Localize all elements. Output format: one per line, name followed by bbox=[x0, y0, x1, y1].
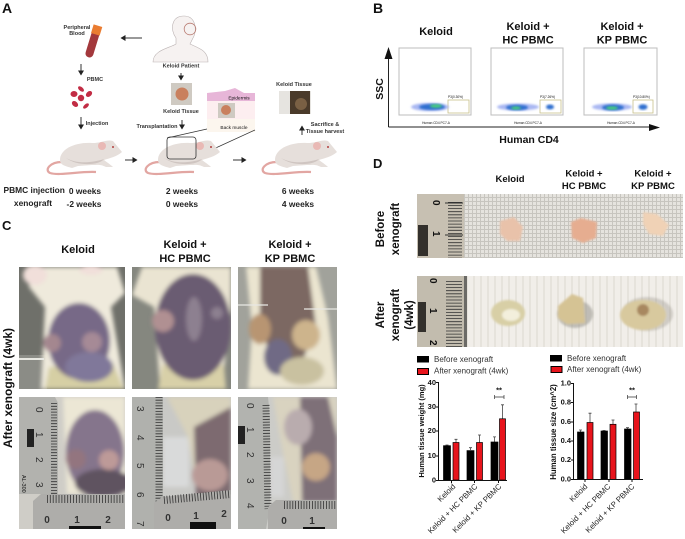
timeline row: PBMC injection bbox=[4, 185, 314, 196]
error bars bbox=[446, 405, 504, 450]
arrow: blood to PBMC bbox=[80, 64, 82, 75]
skin section inset bbox=[207, 88, 255, 132]
arrow: mouse 2 to mouse 3 bbox=[233, 159, 246, 161]
photo: keloid with rulers: 2 bbox=[33, 457, 44, 463]
arrowheads bbox=[384, 47, 660, 131]
photo: HC PBMC with rulers: 6 bbox=[134, 492, 145, 498]
bars bbox=[578, 412, 640, 480]
photo: harvested tissue bbox=[279, 91, 311, 114]
row label: after xenograft: After bbox=[375, 302, 387, 328]
y tick labels: 0.6 bbox=[561, 417, 571, 426]
panel letter C: C bbox=[2, 218, 12, 233]
row label: before xenograft: Before bbox=[375, 211, 387, 247]
flow plot: keloid + KP PBMC: P3(10.80%) bbox=[633, 95, 650, 99]
flow plot: keloid: Human CD4 PC7-A bbox=[422, 121, 451, 125]
timeline row: xenograft: 0 weeks bbox=[166, 199, 198, 209]
flow plot: keloid + HC PBMC: Human CD4 PC7-A bbox=[514, 121, 543, 125]
y tick labels: 0.2 bbox=[561, 455, 571, 464]
photo: HC PBMC with rulers: 2 bbox=[221, 509, 227, 520]
photo: KP PBMC with rulers bbox=[238, 397, 337, 529]
y axis title: Human tissue weight (mg) bbox=[417, 384, 426, 478]
y tick labels: 0 bbox=[432, 476, 436, 484]
column title: HC PBMC: HC PBMC bbox=[159, 253, 211, 265]
photo: KP PBMC with rulers: 0 bbox=[244, 403, 255, 409]
column title: KP PBMC: Keloid + bbox=[268, 239, 312, 251]
photo: keloid with rulers: AL-300 bbox=[20, 475, 26, 493]
panel C: mouse photos bbox=[1, 218, 337, 529]
arrow: transplantation bbox=[181, 120, 183, 129]
timeline row: PBMC injection: 6 weeks bbox=[282, 186, 314, 196]
arrow: patient to tissue bbox=[180, 73, 182, 80]
column title: keloid: Keloid bbox=[495, 174, 525, 185]
row label: before xenograft: xenograft bbox=[390, 203, 402, 255]
axis arrows bbox=[388, 54, 654, 127]
x labels: Keloid + HC PBMC bbox=[559, 482, 613, 535]
row label: after xenograft: xenograft bbox=[390, 289, 402, 341]
inset zoom lines bbox=[167, 129, 255, 157]
photo: keloid with rulers: 3 bbox=[33, 482, 44, 488]
column title: KP PBMC: KP PBMC bbox=[265, 253, 315, 265]
arrow: patient to blood bbox=[121, 37, 142, 39]
mouse 3 bbox=[263, 140, 337, 174]
photo strip: before xenograft: 1 bbox=[430, 231, 441, 237]
photo: HC PBMC dorsal bbox=[132, 267, 231, 389]
peripheral blood label: Peripheral bbox=[64, 25, 90, 31]
panel B: flow cytometry bbox=[373, 0, 660, 146]
x axis label: Human CD4 bbox=[499, 134, 559, 146]
photo strip: before xenograft: 0 bbox=[430, 200, 441, 206]
sacrifice label: Tissue harvest bbox=[306, 129, 344, 135]
photo: keloid with rulers: 1 bbox=[33, 432, 44, 438]
significance stars: ** bbox=[496, 386, 502, 394]
column titles: Keloid bbox=[419, 26, 453, 38]
skin section inset: Back muscle bbox=[220, 125, 248, 131]
photo: keloid with rulers bbox=[19, 397, 125, 529]
bar chart: human tissue weight bbox=[417, 378, 507, 535]
legend: size chart bbox=[550, 354, 642, 374]
arrow: mouse 1 to mouse 2 bbox=[125, 159, 137, 161]
flow plot: keloid + KP PBMC bbox=[584, 48, 657, 125]
photo strip: after xenograft: 1 bbox=[427, 308, 438, 314]
timeline row: xenograft: 4 weeks bbox=[282, 199, 314, 209]
significance bracket bbox=[628, 395, 636, 399]
photo: keloid with rulers: 2 bbox=[105, 515, 111, 526]
photo: KP PBMC with rulers: 4 bbox=[244, 503, 255, 509]
y tick labels bbox=[428, 378, 436, 484]
timeline row: xenograft: xenograft bbox=[14, 198, 52, 208]
keloid tissue label: Keloid Tissue bbox=[163, 109, 199, 115]
timeline row: PBMC injection: 2 weeks bbox=[166, 186, 198, 196]
photo: HC PBMC with rulers: 7 bbox=[134, 521, 145, 527]
y tick labels: 20 bbox=[428, 426, 436, 435]
x labels bbox=[426, 482, 504, 535]
y tick labels: 0.0 bbox=[561, 474, 571, 484]
keloid patient label: Keloid Patient bbox=[163, 64, 200, 70]
arrow: harvest bbox=[301, 126, 303, 135]
column title: HC PBMC: Keloid + bbox=[565, 168, 603, 180]
timeline row: xenograft bbox=[14, 198, 314, 209]
photo: HC PBMC with rulers bbox=[132, 397, 231, 529]
photo: keloid with rulers: 0 bbox=[44, 515, 50, 526]
panel letter D: D bbox=[373, 156, 382, 171]
column title: HC PBMC: Keloid + bbox=[163, 239, 207, 251]
axes bbox=[436, 382, 507, 483]
x labels: Keloid bbox=[436, 482, 457, 504]
photo: keloid with rulers: 1 bbox=[74, 515, 80, 526]
y tick labels bbox=[561, 378, 572, 484]
icon: keloid patient bbox=[153, 16, 208, 62]
flow plot: keloid + HC PBMC: P3(7.26%) bbox=[540, 95, 555, 99]
photo strip: after xenograft: 2 bbox=[427, 340, 438, 346]
y tick labels: 0.8 bbox=[561, 398, 571, 406]
photo: HC PBMC with rulers: 4 bbox=[134, 435, 145, 441]
legend: size chart: Before xenograft bbox=[567, 354, 627, 363]
timeline row: PBMC injection: PBMC injection bbox=[4, 185, 65, 195]
flow plot: keloid: P3(0.30%) bbox=[448, 95, 463, 99]
significance stars: ** bbox=[629, 386, 635, 394]
photo: keloid with rulers: 0 bbox=[33, 407, 44, 413]
flow plot: keloid bbox=[399, 48, 471, 125]
column titles: KP PBMC bbox=[597, 34, 647, 46]
photo strip: after xenograft bbox=[417, 276, 683, 347]
photo: keloid dorsal bbox=[19, 267, 125, 389]
panel letter A: A bbox=[2, 0, 12, 16]
photo: keloid tissue bbox=[171, 83, 192, 105]
x labels: Keloid + KP PBMC bbox=[584, 482, 637, 535]
bar chart: human tissue size bbox=[549, 378, 643, 535]
legend: weight chart bbox=[417, 355, 509, 376]
PBMC label: PBMC bbox=[87, 77, 103, 83]
x labels: Keloid bbox=[568, 482, 589, 504]
skin section inset: Epidermis bbox=[228, 96, 250, 102]
injection label: Injection bbox=[86, 121, 109, 127]
column title: keloid: Keloid bbox=[61, 244, 95, 256]
photo: HC PBMC with rulers: 5 bbox=[134, 463, 145, 469]
photo: KP PBMC with rulers: 2 bbox=[244, 452, 255, 458]
implant box on mouse 2 bbox=[167, 137, 196, 159]
photo: KP PBMC with rulers: 1 bbox=[309, 516, 315, 527]
y tick labels: 1.0 bbox=[561, 378, 571, 388]
photo: KP PBMC with rulers: 1 bbox=[244, 427, 255, 433]
flow plot: keloid + KP PBMC: Human CD4 PC7-A bbox=[607, 121, 636, 125]
y tick labels: 0.4 bbox=[561, 436, 572, 445]
x labels bbox=[559, 482, 637, 535]
photo: HC PBMC with rulers: 0 bbox=[165, 513, 171, 524]
row label: After xenograft (4wk) bbox=[1, 328, 15, 448]
icon: blood tube bbox=[84, 24, 102, 59]
y tick labels: 10 bbox=[428, 451, 436, 460]
row label: after xenograft: (4wk) bbox=[404, 300, 416, 330]
photo: HC PBMC with rulers: 3 bbox=[134, 406, 145, 412]
keloid tissue outcome label: Keloid Tissue bbox=[276, 82, 312, 88]
column titles: Keloid + bbox=[600, 21, 644, 33]
y axis label: SSC bbox=[374, 78, 386, 100]
timeline row: PBMC injection: 0 weeks bbox=[69, 186, 101, 196]
transplantation label: Transplantation bbox=[137, 124, 178, 130]
error bars bbox=[579, 404, 638, 432]
column title: HC PBMC: HC PBMC bbox=[562, 181, 606, 192]
timeline row: xenograft: -2 weeks bbox=[67, 199, 102, 209]
photo: HC PBMC with rulers: 1 bbox=[193, 511, 199, 522]
panel D: tissue photos and charts bbox=[373, 156, 683, 535]
bars bbox=[444, 419, 506, 480]
legend: size chart: After xenograft (4wk) bbox=[567, 365, 642, 374]
mouse 2 bbox=[146, 140, 220, 174]
column title: KP PBMC: Keloid + bbox=[634, 168, 672, 180]
column titles: HC PBMC bbox=[502, 34, 554, 46]
legend: weight chart: Before xenograft bbox=[434, 355, 494, 364]
column title: KP PBMC: KP PBMC bbox=[631, 181, 675, 192]
x labels: Keloid + HC PBMC bbox=[426, 482, 480, 535]
photo: KP PBMC with rulers: 3 bbox=[244, 478, 255, 484]
panel A: experimental timeline bbox=[2, 0, 344, 209]
column titles bbox=[419, 21, 647, 46]
photo: KP PBMC dorsal bbox=[238, 267, 337, 389]
axes bbox=[571, 383, 643, 482]
y tick labels: 40 bbox=[428, 378, 436, 387]
peripheral blood label: Blood bbox=[69, 31, 85, 37]
x labels: Keloid + KP PBMC bbox=[451, 482, 504, 535]
column titles: Keloid + bbox=[506, 21, 550, 33]
mouse 1 bbox=[48, 140, 122, 174]
significance bracket bbox=[494, 395, 504, 399]
photo strip: before xenograft bbox=[417, 194, 683, 258]
y tick labels: 30 bbox=[428, 402, 436, 411]
y axis title: Human tissue size (cm^2) bbox=[549, 384, 558, 480]
arrow: injection bbox=[80, 117, 82, 129]
photo strip: after xenograft: 0 bbox=[427, 278, 438, 284]
flow plot: keloid + HC PBMC bbox=[491, 48, 563, 125]
photo: KP PBMC with rulers: 0 bbox=[281, 516, 287, 527]
legend: weight chart: After xenograft (4wk) bbox=[434, 366, 509, 376]
panel letter B: B bbox=[373, 0, 383, 16]
sacrifice label: Sacrifice & bbox=[311, 122, 339, 128]
icon: PBMC cells bbox=[70, 85, 93, 110]
